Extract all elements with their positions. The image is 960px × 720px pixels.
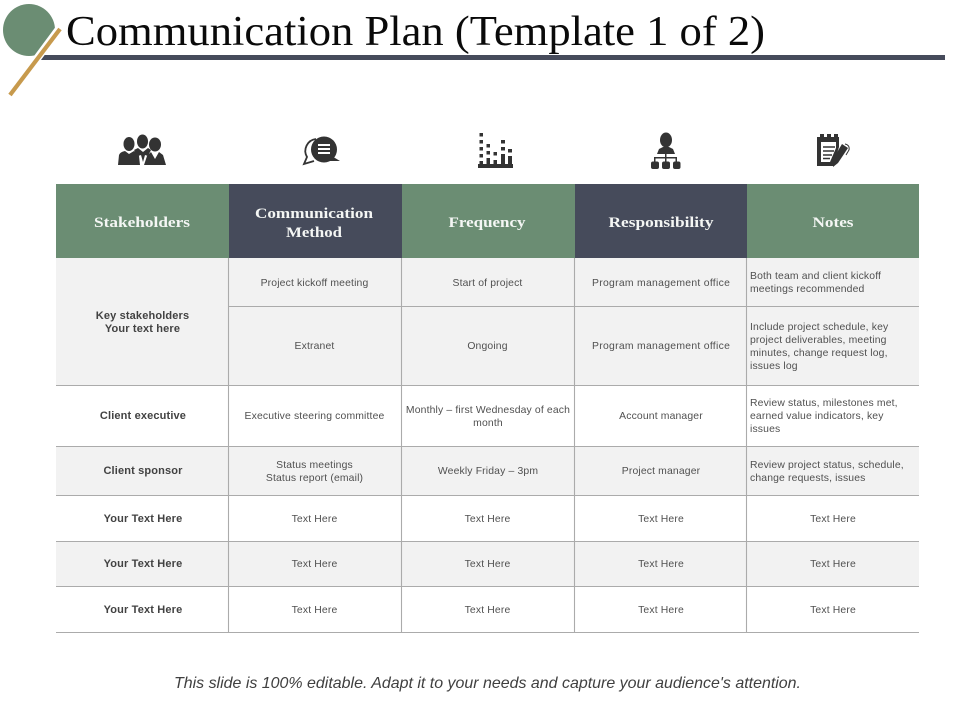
table [56, 184, 919, 632]
row: client sponsor: change requests, issues [750, 473, 866, 484]
icon: frequency dot bars [478, 133, 513, 168]
header: Frequency [402, 184, 575, 258]
row: client executive: issues [750, 424, 780, 435]
header: Frequency: Frequency [448, 215, 526, 231]
row: key stakeholders: minutes, change request log, [750, 348, 888, 359]
row: placeholder 2: Text Here [810, 559, 856, 570]
row: client executive: Client executive [100, 410, 186, 422]
row: key stakeholders: Program management office [592, 278, 730, 289]
row: client sponsor [103, 460, 904, 484]
row: client executive [100, 398, 898, 435]
row: placeholder 3: Your Text Here [104, 604, 182, 616]
row: placeholder 2: Text Here [638, 559, 684, 570]
row: placeholder 1: Text Here [810, 514, 856, 525]
row: placeholder 2 [104, 558, 856, 570]
row: placeholder 1: Text Here [638, 514, 684, 525]
row: placeholder 3: Text Here [292, 605, 337, 616]
row: placeholder 2: Your Text Here [104, 558, 182, 570]
row: client sponsor: Client sponsor [103, 465, 183, 477]
header: Communication Method: Method [286, 225, 342, 241]
row: key stakeholders: Ongoing [467, 341, 508, 352]
icon: notes with pen [817, 134, 849, 167]
title: Communication Plan (Template 1 of 2) [66, 9, 765, 55]
row: placeholder 1 [104, 513, 856, 525]
row: key stakeholders: Project kickoff meeting [261, 278, 368, 289]
row: placeholder 3: Text Here [465, 605, 510, 616]
row: key stakeholders: Include project schedule, key [750, 322, 889, 333]
header: Notes [747, 184, 919, 258]
row: placeholder 1: Text Here [292, 514, 337, 525]
row: placeholder 2: Text Here [465, 559, 510, 570]
row: client sponsor: Weekly Friday – 3pm [438, 466, 538, 477]
header: Responsibility: Responsibility [608, 215, 714, 231]
row: key stakeholders: meetings recommended [750, 284, 865, 295]
row: key stakeholders: Key stakeholders [96, 310, 189, 322]
icon: speech bubbles [304, 136, 340, 164]
row: client executive: Monthly – first Wednesday of each [406, 405, 570, 416]
row: key stakeholders: project deliverables, meeting [750, 335, 887, 346]
row: client sponsor: Status report (email) [266, 473, 363, 484]
row: client sponsor: Review project status, schedule, [750, 460, 904, 471]
row: key stakeholders: Program management office [592, 341, 730, 352]
row: client executive: Account manager [619, 411, 703, 422]
icon: stakeholders group [118, 134, 166, 165]
row: key stakeholders: Extranet [295, 341, 334, 352]
icon: responsibility org chart [651, 132, 680, 169]
row: client executive: earned value indicators, key [750, 411, 884, 422]
row: placeholder 3: Text Here [810, 605, 856, 616]
row: client sponsor: Status meetings [276, 460, 353, 471]
row: placeholder 1: Text Here [465, 514, 510, 525]
row backgrounds and grid lines [56, 258, 919, 632]
row: placeholder 3: Text Here [638, 605, 684, 616]
row: client sponsor: Project manager [622, 466, 701, 477]
footer note: This slide is 100% editable. Adapt it to your needs and capture your audience's attention. [174, 675, 801, 692]
row: key stakeholders: issues log [750, 361, 798, 372]
row: placeholder 2: Text Here [292, 559, 337, 570]
row: key stakeholders [96, 271, 889, 372]
header: Communication Method: Communication [255, 206, 373, 222]
header decoration: circle and diagonal pencil line [3, 4, 945, 95]
header: Notes: Notes [812, 215, 854, 231]
row: placeholder 3 [104, 604, 856, 616]
row: placeholder 1: Your Text Here [104, 513, 182, 525]
row: client executive: Review status, milestones met, [750, 398, 898, 409]
header: Stakeholders [56, 184, 229, 258]
row: key stakeholders: Start of project [453, 278, 522, 289]
row: key stakeholders: Both team and client kickoff [750, 271, 881, 282]
row: client executive: Executive steering committee [245, 411, 385, 422]
header: Communication Method [229, 184, 402, 258]
header: Responsibility [575, 184, 747, 258]
header: Stakeholders: Stakeholders [94, 215, 190, 231]
row: client executive: month [473, 418, 503, 429]
row: key stakeholders: Your text here [105, 323, 180, 335]
